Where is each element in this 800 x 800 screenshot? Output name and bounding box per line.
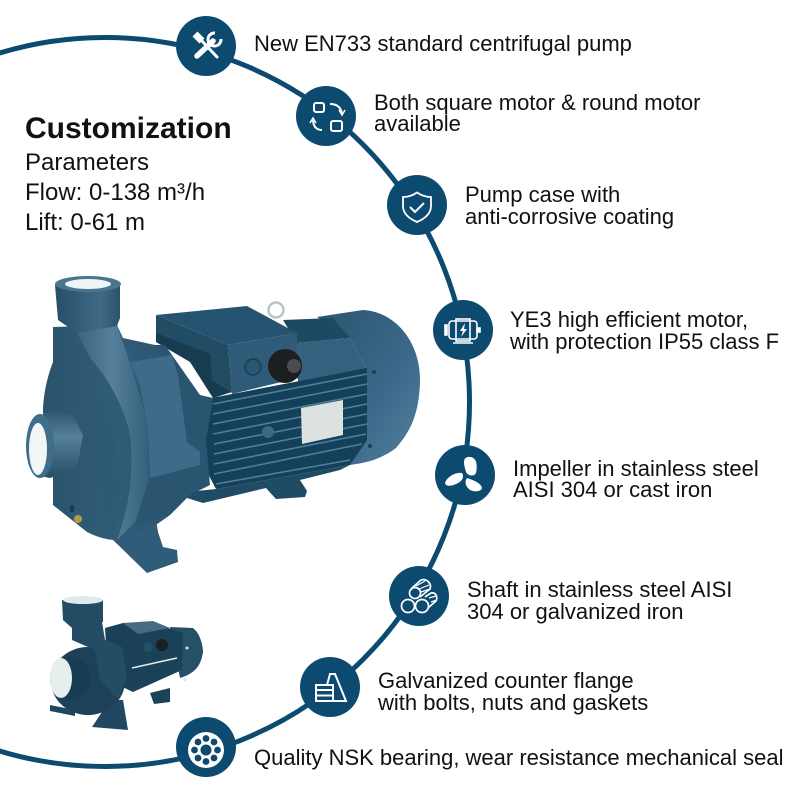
label: 304 or galvanized iron [467,599,683,624]
left foot [50,705,75,716]
label: anti-corrosive coating [465,204,674,229]
item 6 [389,566,732,626]
volute [51,647,125,715]
lower volute shade [135,470,187,525]
parameters text: Parameters [25,149,149,176]
fan screws [372,370,376,374]
icon: impeller [435,445,495,505]
rear flange [130,345,213,515]
eye bolt [268,302,284,318]
label: with protection IP55 class F [509,329,779,354]
volute body [43,325,187,540]
icon: square and round [296,86,356,146]
item 8 [176,717,783,777]
label: New EN733 standard centrifugal pump [254,31,632,56]
label: Quality NSK bearing, wear resistance mechanical seal [254,745,783,770]
item 1 [176,16,632,76]
fan cover [317,310,420,465]
outlet [62,600,103,628]
label: Both square motor & round motor [374,90,700,115]
label: Galvanized counter flange [378,668,634,693]
icon: flange [300,657,360,717]
terminal box sides [156,315,232,393]
label: AISI 304 or cast iron [513,477,712,502]
parameters text: Flow: 0-138 m³/h [25,179,205,206]
inner dome shade [93,385,119,540]
label: Shaft in stainless steel AISI [467,577,732,602]
motor [105,623,183,692]
motor screw [262,426,274,438]
motor bottom and feet [187,465,350,503]
inlet [50,656,90,700]
motor shoulder [297,338,367,384]
nameplate [301,400,343,444]
item 5 [435,445,759,505]
brass plug [74,515,82,523]
icon: shield [387,175,447,235]
item 2 [296,86,700,146]
outlet neck [55,285,120,333]
inlet lip [26,414,54,478]
label: YE3 high efficient motor, [510,307,748,332]
terminal box front [228,333,298,394]
large pump image [26,276,420,573]
item 3 [387,175,674,235]
item 4 [433,300,779,360]
right foot [92,700,128,730]
item 7 [300,657,648,717]
label: Impeller in stainless steel [513,456,759,481]
rear ribs [283,318,350,343]
heading: Customization [25,112,232,145]
inlet neck [40,410,83,478]
parameters text [25,149,205,236]
label: Pump case with [465,182,620,207]
gland [156,639,168,651]
foot [113,495,178,573]
motor foot [150,688,170,704]
fan [170,627,203,678]
outlet opening [55,276,121,292]
cable gland [268,349,302,383]
inlet opening [29,423,47,475]
small pump image [50,596,203,730]
highlighted rib [77,325,148,540]
icon: motor [433,300,493,360]
motor fins [206,368,367,489]
connecting circle arc [0,38,470,766]
icon: shafts [389,566,449,626]
flange band [130,355,200,478]
icon: tools [176,16,236,76]
parameters text: Lift: 0-61 m [25,209,145,236]
label: available [374,111,461,136]
terminal box top [156,306,297,345]
icon: bearing [176,717,236,777]
label: with bolts, nuts and gaskets [377,690,648,715]
terminal box fins [156,332,232,398]
